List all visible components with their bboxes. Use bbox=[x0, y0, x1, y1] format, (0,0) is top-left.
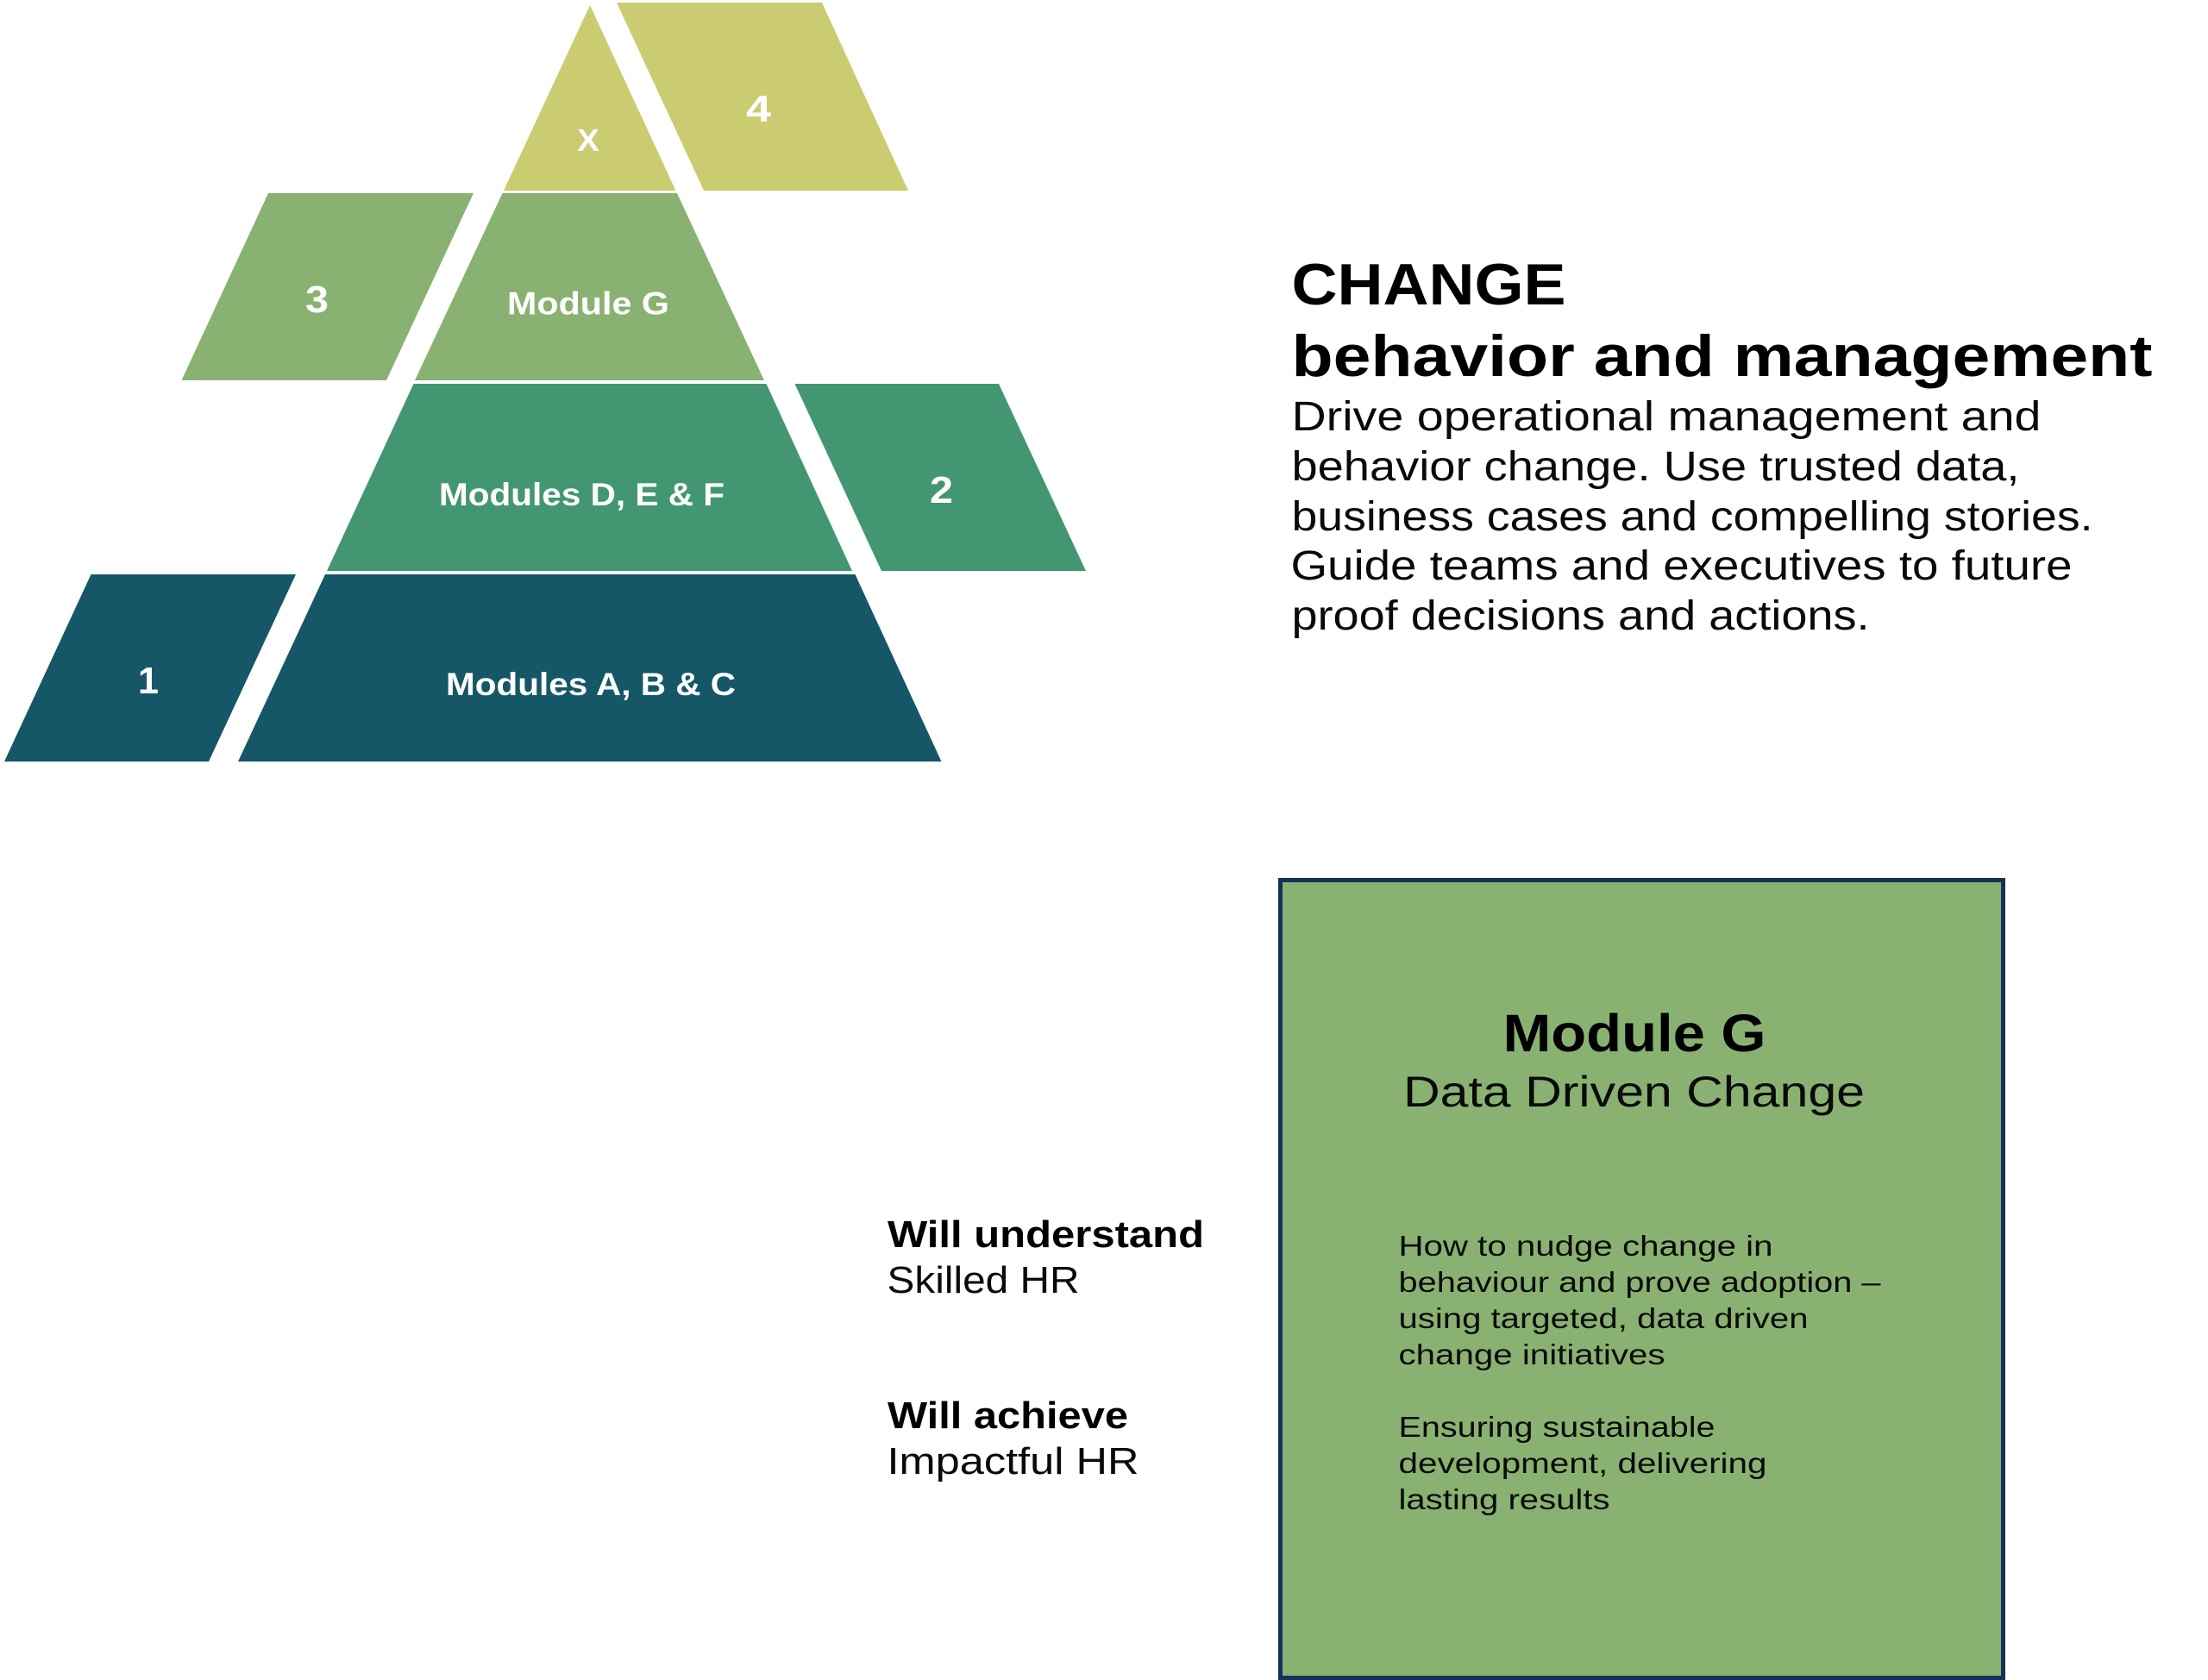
will achieve bbox=[887, 1395, 1138, 1483]
panel description: behaviour and prove adoption – bbox=[1399, 1266, 1881, 1298]
step 4 parallelogram: 4 bbox=[746, 88, 772, 130]
step 1 parallelogram bbox=[4, 574, 296, 762]
pyramid tier: Module G bbox=[415, 193, 764, 380]
pyramid tier: Modules D, E and F bbox=[327, 384, 852, 571]
panel title: Module G bbox=[1502, 1004, 1766, 1063]
panel description: using targeted, data driven bbox=[1399, 1302, 1808, 1334]
panel description: lasting results bbox=[1399, 1483, 1609, 1515]
heading: behavior and management bbox=[1292, 323, 2153, 389]
intro text block: Drive operational management and bbox=[1292, 394, 2041, 440]
step 4 parallelogram bbox=[617, 3, 908, 191]
step 2 parallelogram: 2 bbox=[930, 469, 953, 511]
pyramid tier: Modules A, B and C bbox=[238, 574, 942, 762]
pyramid tier: Modules A, B and C: Modules A, B & C bbox=[446, 667, 736, 702]
pyramid tier: Module G: Module G bbox=[507, 286, 669, 321]
step 1 parallelogram: 1 bbox=[138, 660, 159, 702]
pyramid diagram bbox=[4, 3, 1086, 762]
step 3 parallelogram bbox=[181, 193, 474, 380]
panel description: Ensuring sustainable bbox=[1399, 1411, 1715, 1443]
step 3 parallelogram: 3 bbox=[305, 279, 329, 321]
intro text block bbox=[1290, 394, 2092, 639]
intro text block: business cases and compelling stories. bbox=[1292, 494, 2092, 540]
panel subtitle: Data Driven Change bbox=[1403, 1068, 1865, 1116]
will achieve: Impactful HR bbox=[887, 1440, 1138, 1483]
heading: CHANGE bbox=[1292, 252, 1566, 317]
will understand: Will understand bbox=[888, 1213, 1204, 1256]
outcomes text block bbox=[887, 1213, 1204, 1483]
will achieve: Will achieve bbox=[888, 1395, 1128, 1437]
panel description: change initiatives bbox=[1399, 1338, 1665, 1370]
step 2 parallelogram bbox=[795, 384, 1086, 571]
panel: Module G bbox=[1280, 880, 2003, 1678]
panel description: How to nudge change in bbox=[1399, 1230, 1773, 1262]
will understand bbox=[887, 1213, 1204, 1301]
heading bbox=[1292, 252, 2153, 389]
pyramid tier: X apex bbox=[504, 5, 676, 191]
pyramid tier: Modules D, E and F: Modules D, E & F bbox=[439, 477, 724, 512]
will understand: Skilled HR bbox=[887, 1259, 1080, 1301]
panel description: development, delivering bbox=[1399, 1447, 1766, 1479]
pyramid tier: X apex: X bbox=[577, 122, 599, 158]
intro text block: proof decisions and actions. bbox=[1292, 593, 1870, 639]
intro text block: Guide teams and executives to future bbox=[1290, 543, 2072, 589]
intro text block: behavior change. Use trusted data, bbox=[1292, 444, 2020, 490]
panel description bbox=[1399, 1230, 1881, 1515]
